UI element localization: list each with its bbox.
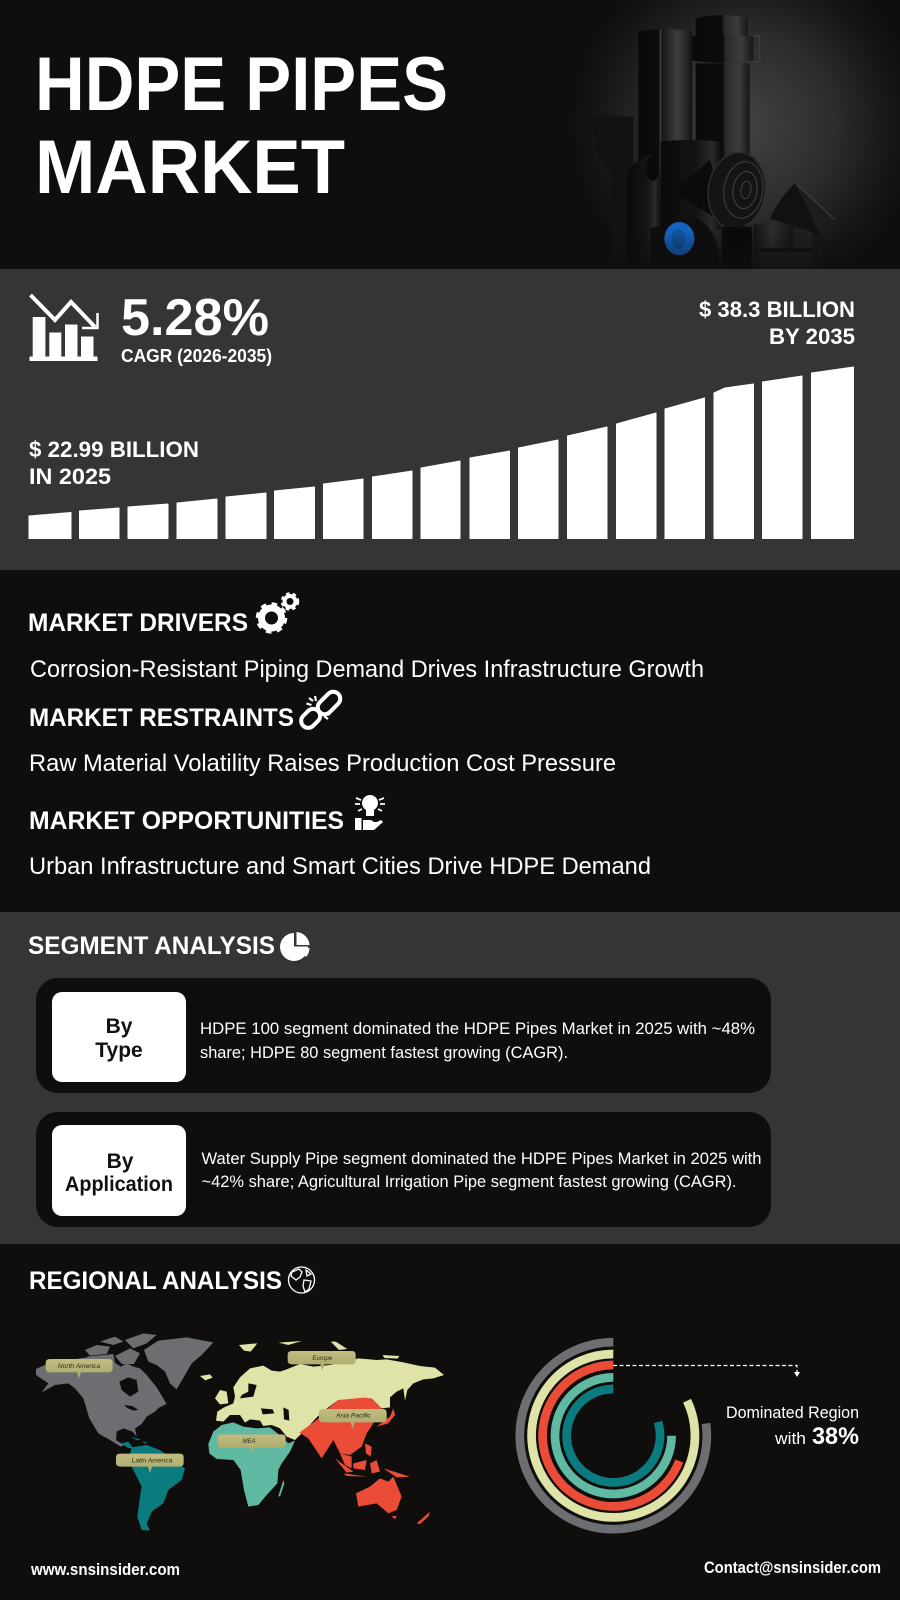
footer: website: www.snsinsider.com (30, 1561, 180, 1579)
heading: market opportunities: MARKET OPPORTUNITIES (29, 807, 344, 835)
badge: by type (52, 992, 186, 1082)
panel: regional analysis (0, 1244, 900, 1600)
arrow: dashed leader line (613, 1366, 800, 1377)
label: 2035 value: BY 2035 (769, 324, 855, 349)
callout: Europe (288, 1351, 356, 1371)
callout: North America: North America (58, 1363, 100, 1370)
panel: segment analysis (0, 912, 900, 1244)
callout: dominated region: Dominated Region (726, 1404, 859, 1422)
badge: by type: Type (95, 1039, 143, 1062)
card: by application (36, 1112, 771, 1227)
region: North America (36, 1333, 213, 1447)
heading: market drivers: MARKET DRIVERS (28, 609, 248, 637)
heading: regional analysis: REGIONAL ANALYSIS (29, 1267, 282, 1295)
callout: Latin America (116, 1454, 184, 1473)
icon: broken chain (298, 689, 343, 731)
title: MARKET (35, 125, 345, 210)
callout: Latin America: Latin America (132, 1458, 173, 1465)
text: opportunity: Urban Infrastructure and Smart Cities Drive HDPE Demand (29, 853, 651, 880)
text: restraint: Raw Material Volatility Raises Production Cost Pressure (29, 750, 616, 777)
label: 2025 value: IN 2025 (29, 464, 111, 489)
text: by type description: share; HDPE 80 segment fastest growing (CAGR). (200, 1043, 568, 1062)
footer: contact: Contact@snsinsider.com (704, 1559, 881, 1577)
CAGR value: 5.28% (121, 289, 269, 347)
panel: market size (0, 269, 900, 570)
callout: Asia Pacific (319, 1409, 387, 1429)
text: driver: Corrosion-Resistant Piping Demand Drives Infrastructure Growth (30, 656, 704, 683)
icon: chart with arrow (30, 295, 98, 361)
callout: MEA: MEA (242, 1438, 256, 1445)
callout: dominated region (726, 1404, 859, 1450)
panel: header (0, 0, 900, 270)
label: 2035 value (699, 297, 855, 349)
title: HDPE PIPES (35, 42, 448, 127)
world map (36, 1333, 444, 1531)
title (35, 42, 448, 210)
callout: dominated region: with (774, 1430, 806, 1448)
icon: pie chart (280, 932, 310, 961)
callout: Asia Pacific: Asia Pacific (335, 1413, 371, 1420)
text: by application description (202, 1149, 762, 1191)
region: Asia Pacific (299, 1398, 430, 1524)
callout: Europe: Europe (312, 1355, 333, 1362)
bar chart: market growth (29, 367, 854, 538)
label: 2025 value: $ 22.99 BILLION (29, 437, 199, 462)
card: by type (36, 978, 771, 1093)
heading: market restraints: MARKET RESTRAINTS (29, 704, 294, 732)
icon: globe (288, 1267, 314, 1293)
region: Middle East and Africa (208, 1422, 295, 1507)
callout: MEA (218, 1434, 286, 1454)
text: by type description: HDPE 100 segment dominated the HDPE Pipes Market in 2025 with ~48% (200, 1019, 755, 1038)
badge: by application: By (107, 1150, 134, 1173)
text: by type description (200, 1019, 755, 1062)
badge: by application (52, 1125, 186, 1216)
region: Latin America (121, 1437, 185, 1531)
icon: gears (258, 594, 298, 632)
heading: segment analysis: SEGMENT ANALYSIS (28, 932, 275, 960)
region: Europe and North Asia (200, 1341, 444, 1440)
panel: market dynamics (0, 570, 900, 912)
text: by application description: Water Supply Pipe segment dominated the HDPE Pipes Market in 2025 with (202, 1149, 762, 1168)
icon: lightbulb over hand (355, 795, 385, 830)
text: by application description: ~42% share; Agricultural Irrigation Pipe segment fastest growing (CAGR). (202, 1172, 736, 1191)
label: 2035 value: $ 38.3 BILLION (699, 297, 855, 322)
image: HDPE pipes and fittings (580, 15, 860, 270)
callout: dominated region: 38% (812, 1423, 859, 1450)
badge: by type: By (106, 1015, 133, 1038)
CAGR label: CAGR (2026-2035) (121, 346, 272, 366)
badge: by application: Application (65, 1173, 173, 1196)
callout: North America (46, 1359, 113, 1379)
radial bar chart: regional share (520, 1342, 707, 1529)
label: 2025 value (29, 437, 199, 489)
